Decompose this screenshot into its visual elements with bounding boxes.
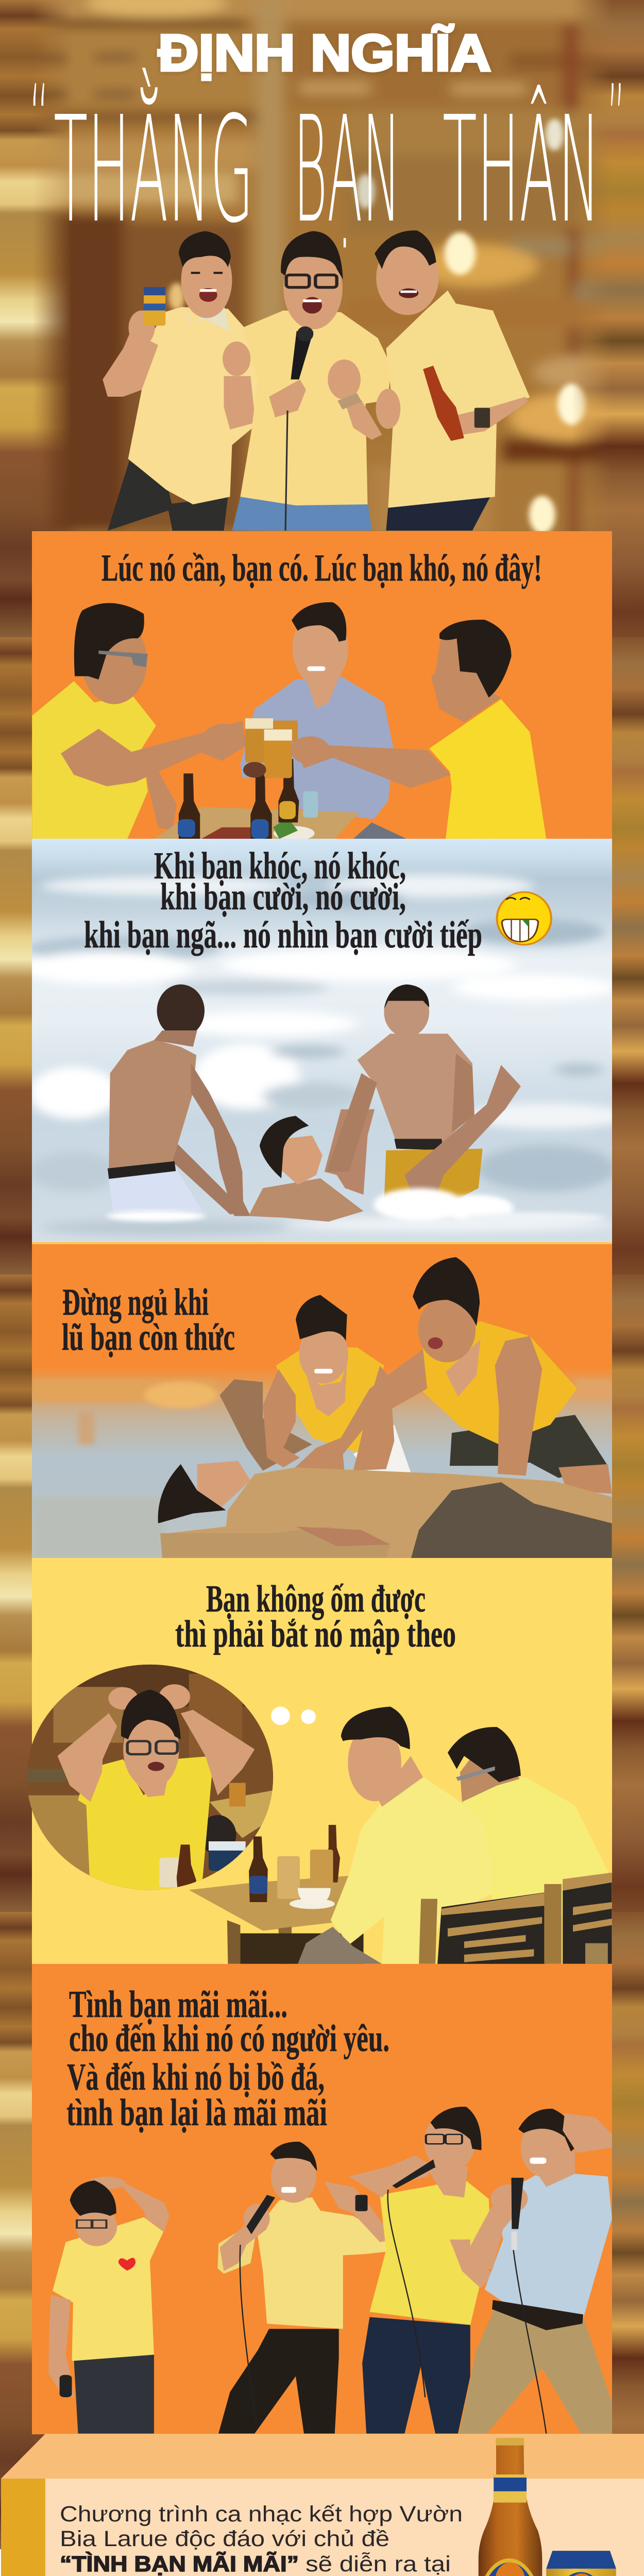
panel: orange friendship forever	[32, 1964, 612, 2434]
body text: programme intro: sẽ diễn ra tại	[306, 2552, 451, 2576]
title: ĐỊNH NGHĨA: ĐỊNH NGHĨA	[158, 24, 491, 82]
heading: sea lines	[84, 845, 482, 956]
man lying under the sand	[158, 1461, 612, 1560]
thought dots	[271, 1707, 290, 1725]
panel: friends playing in the sea	[21, 839, 629, 1242]
person: singer in pale yellow shirt	[218, 2142, 400, 2433]
body text: programme intro	[60, 2502, 463, 2576]
person: sad friend with broken heart	[48, 2177, 169, 2433]
person: man holding a leg	[327, 985, 521, 1208]
heading: friendship forever: cho đến khi nó có người yêu.	[69, 2018, 389, 2060]
heading: don't sleep: lũ bạn còn thức	[62, 1316, 235, 1359]
person: friend in dark hair behind	[448, 1727, 612, 1934]
divider strip	[32, 1242, 612, 1244]
thought bubble: friend in yellow tee	[25, 1664, 316, 1894]
heading: don't sleep	[62, 1281, 235, 1359]
heading: can't get thin: thì phải bắt nó mập theo	[175, 1613, 456, 1655]
body text: programme intro: Bia Larue độc đáo với chủ đề	[60, 2527, 389, 2551]
body text: programme intro: “TÌNH BẠN MÃI MÃI”	[60, 2552, 299, 2576]
heading: sea lines: Khi bạn khóc, nó khóc,	[154, 845, 406, 887]
person: man in checked shirt	[240, 602, 394, 819]
heading: sea lines: khi bạn cười, nó cười,	[160, 876, 406, 918]
heading: friendship forever: Tình bạn mãi mãi...	[69, 1984, 287, 2026]
water splash	[107, 1188, 604, 1223]
person: man from behind in polo	[291, 620, 546, 839]
person: man with glasses in yellow shirt	[32, 603, 246, 839]
photo: three friends with beer and microphone	[103, 230, 530, 531]
waves	[21, 874, 629, 1235]
can	[546, 2551, 616, 2576]
person: singer in blue shirt	[459, 2109, 612, 2433]
title: ĐỊNH NGHĨA: ĐỊNH NGHĨA	[157, 26, 492, 83]
panel: event information box	[0, 2434, 644, 2576]
table with bottles and glasses	[189, 1825, 382, 1964]
person: left friend	[103, 231, 260, 531]
title: Thằng bạn thân handwritten: “	[29, 64, 49, 178]
body text: programme intro: Chương trình ca nhạc kết hợp Vườn	[60, 2502, 463, 2527]
title: Thằng bạn thân handwritten: BẠN	[294, 84, 401, 255]
bamboo chairs	[419, 1873, 612, 1964]
person: right friend with bottle	[375, 230, 530, 531]
icon: grinning emoji	[497, 892, 551, 945]
person: man falling into the water	[248, 1109, 375, 1222]
man in Lakers jersey, right	[292, 1257, 612, 1494]
heading: don't sleep: Đừng ngủ khi	[62, 1281, 209, 1324]
reflections in the water	[33, 1379, 612, 1560]
table with bottles and beer mugs	[154, 718, 406, 840]
person: center friend with microphone	[232, 231, 391, 531]
bottle	[478, 2438, 542, 2576]
heading: friendship forever: Và đến khi nó bị bồ đá,	[67, 2056, 325, 2098]
product: Larue bottle and can	[478, 2438, 616, 2576]
title: Thằng bạn thân handwritten: THẰNG	[54, 67, 253, 255]
panel: burying a friend in sand	[32, 1244, 612, 1560]
heading: friendship forever	[66, 1984, 389, 2134]
person: singer in yellow polo	[349, 2107, 495, 2433]
person: friend looking back	[298, 1707, 492, 1964]
person: man seen from behind	[108, 985, 250, 1216]
panel: orange friends toasting	[32, 531, 612, 840]
man in Lakers jersey, left	[220, 1295, 411, 1472]
heading: can't get thin	[175, 1578, 456, 1655]
panel: yellow, can't get thin	[25, 1558, 612, 1964]
heading: friendship forever: tình bạn lại là mãi mãi	[66, 2092, 327, 2134]
heading: can't get thin: Bạn không ốm được	[206, 1578, 426, 1620]
